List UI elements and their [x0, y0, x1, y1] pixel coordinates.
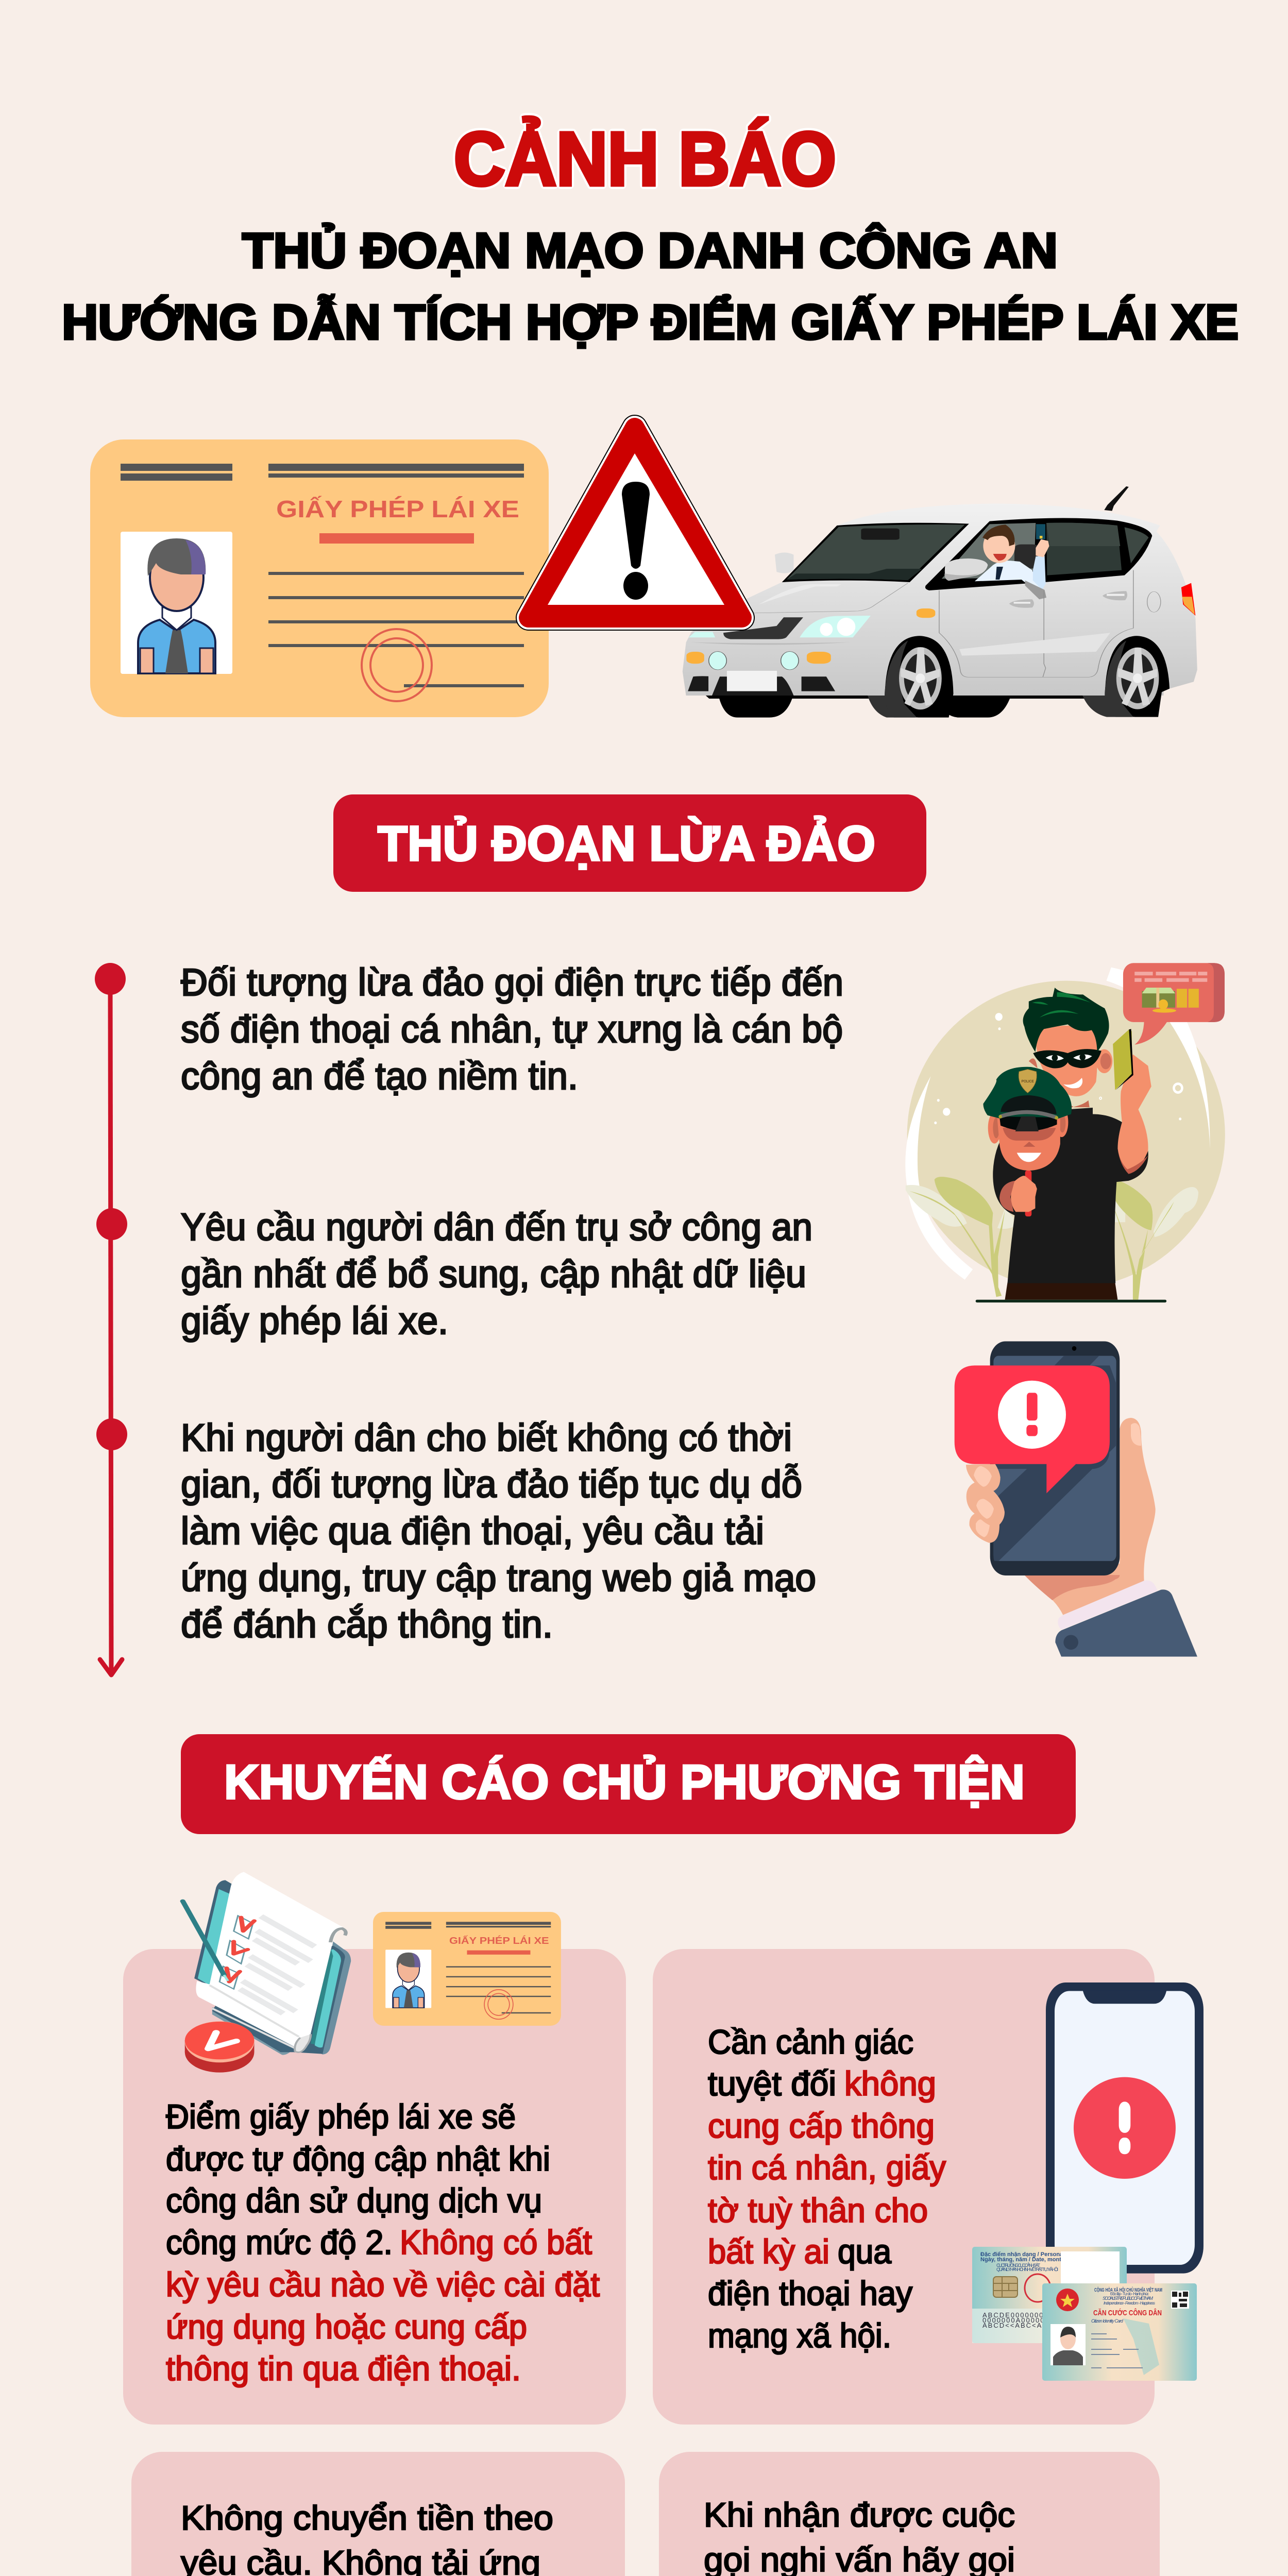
icon: speech bubble: [1123, 963, 1225, 1045]
text: advice 2 body: [708, 2023, 946, 2354]
text: advice 2 body: qua: [838, 2232, 891, 2270]
icon: checklist clipboard with pen and button: [183, 1872, 351, 2073]
icon: police mask: POLICE: [1021, 1080, 1034, 1083]
icon: citizen ID card front: CỘNG HÒA XÃ HỘI CHỦ NGHĨA VIỆT NAM: [1094, 2286, 1162, 2293]
text: advice 1 body: kỳ yêu cầu nào về việc cài đặt: [166, 2265, 600, 2303]
text: advice 2 body: tuyệt đối: [708, 2064, 836, 2103]
icon: citizen ID card front: SOCIALIST REPUBLIC OF VIETNAM: [1103, 2296, 1153, 2301]
icon: small driving licence card: GIẤY PHÉP LÁI XE: [449, 1935, 549, 1946]
icon: citizen ID card front: Citizen Identity Card: [1091, 2318, 1124, 2324]
icon: fingers: [966, 1464, 1005, 1543]
icon: hand holding phone with alert: [955, 1341, 1197, 1656]
text: advice 1 body: công dân sử dụng dịch vụ: [166, 2181, 542, 2219]
text block: step 3: gian, đối tượng lừa đảo tiếp tục dụ dỗ: [181, 1463, 802, 1505]
heading: subtitle two lines: THỦ ĐOẠN MẠO DANH CÔNG AN: [242, 223, 1058, 278]
icon: citizen ID card front: Independence - Freedom - Happiness: [1104, 2301, 1155, 2306]
icon: phone with alert: [1046, 1982, 1204, 2274]
heading banner: KHUYẾN CÁO CHỦ PHƯƠNG TIỆN: KHUYẾN CÁO CHỦ PHƯƠNG TIỆN: [224, 1755, 1025, 1809]
text: advice 3 body: Không chuyển tiền theo: [181, 2499, 553, 2537]
icon: citizen ID card back: Ngày, tháng, năm / Date, month, year:: [980, 2257, 1081, 2263]
panel: advice 1: [123, 1949, 626, 2425]
icon: left leaves: [906, 1177, 1013, 1297]
icon: right leaves: [1111, 1178, 1198, 1300]
text block: step 1: [181, 961, 843, 1097]
icon: warning triangle: [529, 428, 742, 618]
icon: red check button: [185, 2021, 254, 2073]
panel: advice 4: [659, 2452, 1160, 2576]
text: advice 2 body: tin cá nhân, giấy: [708, 2148, 946, 2187]
title: CẢNH BÁO: CẢNH BÁO: [454, 117, 836, 201]
heading banner: KHUYẾN CÁO CHỦ PHƯƠNG TIỆN: [181, 1734, 1076, 1834]
heading banner: THỦ ĐOẠN LỪA ĐẢO: THỦ ĐOẠN LỪA ĐẢO: [378, 816, 875, 871]
icon: rear wheel: [1105, 636, 1170, 717]
icon: hair: [1023, 988, 1109, 1052]
title: CẢNH BÁO: CẢNH BÁO: [454, 117, 836, 201]
text: advice 2 body: không: [844, 2064, 936, 2103]
icon: far tyres: [718, 694, 1011, 718]
text block: step 2: giấy phép lái xe.: [181, 1299, 448, 1342]
icon: citizen ID card back: [972, 2247, 1127, 2343]
icon: citizen ID card back: CỤC TRƯỞNG CỤC CẢNH SÁT: [996, 2262, 1041, 2268]
text: advice 4 body: [704, 2496, 1037, 2576]
text: advice 2 body: điện thoại hay: [708, 2274, 912, 2312]
icon: citizen ID card front: CĂN CƯỚC CÔNG DÂN: [1093, 2308, 1162, 2317]
heading banner: THỦ ĐOẠN LỪA ĐẢO: [333, 794, 926, 892]
text: advice 2 body: tờ tuỳ thân cho: [708, 2191, 928, 2229]
icon: front wheel: [885, 636, 953, 718]
text: advice 2 body: mạng xã hội.: [708, 2316, 891, 2354]
text: advice 3 body: [181, 2499, 553, 2576]
icon: citizen ID card back: ABCD<<ABC<ABC: [982, 2321, 1054, 2329]
text: advice 4 body: Khi nhận được cuộc: [704, 2496, 1015, 2534]
icon: citizen ID card back: ABCDE0000000000: [982, 2311, 1058, 2319]
text: advice 1 body: [166, 2097, 600, 2387]
panel: advice 2: [653, 1949, 1155, 2425]
text block: step 1: Đối tượng lừa đảo gọi điện trực tiếp đến: [181, 961, 843, 1004]
icon: hand and phone: [1113, 1029, 1151, 1174]
text block: step 2: gần nhất để bổ sung, cập nhật dữ liệu: [181, 1252, 806, 1295]
icon: citizen ID card front: Độc lập - Tự do - Hạnh phúc: [1110, 2292, 1149, 2296]
text: advice 1 body: ứng dụng hoặc cung cấp: [166, 2308, 527, 2346]
text block: step 2: Yêu cầu người dân đến trụ sở công an: [181, 1206, 812, 1248]
icon: alert bubble: [955, 1365, 1110, 1493]
text: advice 1 body: Không có bất: [400, 2223, 592, 2261]
panel: advice 3: [131, 2452, 625, 2576]
icon: driving licence card: GIẤY PHÉP LÁI XE: [276, 496, 519, 522]
text: advice 2 body: cung cấp thông: [708, 2107, 935, 2145]
icon: citizen ID card back: 0000000A000000: [982, 2316, 1050, 2324]
text block: step 3: Khi người dân cho biết không có thời: [181, 1416, 792, 1459]
text block: step 3: để đánh cắp thông tin.: [181, 1603, 553, 1646]
text: advice 1 body: thông tin qua điện thoại.: [166, 2349, 521, 2387]
heading: subtitle two lines: [62, 223, 1239, 350]
text: advice 1 body: được tự động cập nhật khi: [166, 2140, 550, 2178]
icon: citizen ID card back: QUẢN LÝ HÀNH CHÍNH VỀ TRẬT TỰ XÃ HỘI: [996, 2266, 1058, 2272]
text block: step 2: [181, 1206, 812, 1342]
text block: step 1: công an để tạo niềm tin.: [181, 1055, 578, 1097]
timeline with arrow: [95, 963, 127, 1675]
text: advice 1 body: Điểm giấy phép lái xe sẽ: [166, 2097, 516, 2136]
icon: police mask: [983, 1067, 1072, 1216]
text: advice 2 body: bất kỳ ai: [708, 2232, 829, 2270]
text block: step 3: làm việc qua điện thoại, yêu cầu tải: [181, 1510, 764, 1552]
icon: citizen ID card front: [1042, 2283, 1197, 2381]
text: advice 1 body: công mức độ 2.: [166, 2223, 393, 2261]
text block: step 3: ứng dụng, truy cập trang web giả mạo: [181, 1556, 816, 1599]
icon: small driving licence card: [373, 1912, 561, 2026]
icon: car with driver: [683, 486, 1197, 718]
text: advice 2 body: Cần cảnh giác: [708, 2023, 913, 2061]
icon: driving licence card: [90, 439, 549, 717]
icon: citizen ID card back: Đặc điểm nhận dạng / Personal indentification:: [980, 2251, 1107, 2258]
heading: subtitle two lines: HƯỚNG DẪN TÍCH HỢP ĐIỂM GIẤY PHÉP LÁI XE: [62, 294, 1239, 350]
icon: scammer with police mask: [905, 963, 1225, 1302]
text block: step 1: số điện thoại cá nhân, tự xưng là cán bộ: [181, 1008, 843, 1050]
text block: step 3: [181, 1416, 816, 1646]
